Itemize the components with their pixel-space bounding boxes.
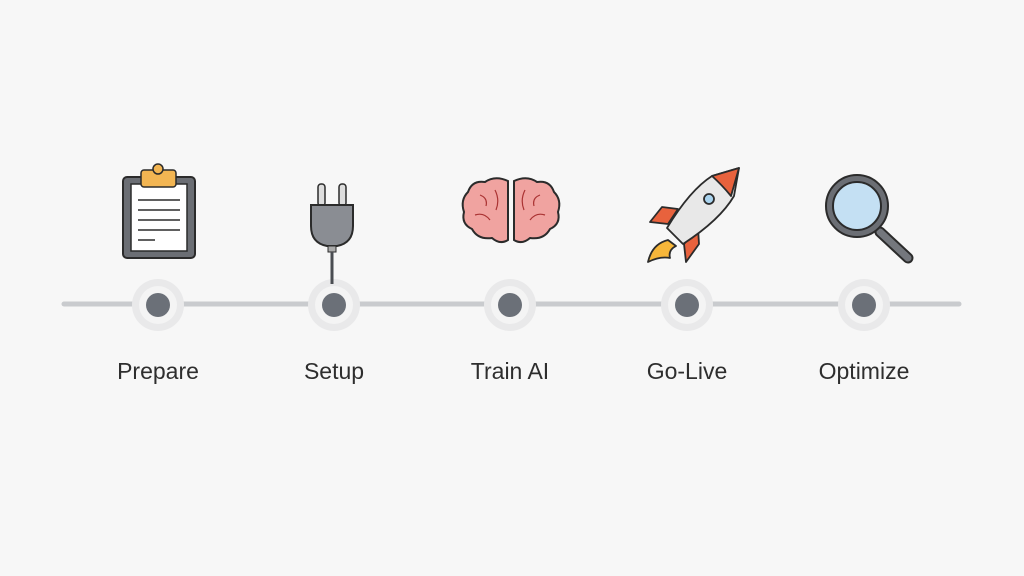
node: Train AI: [484, 279, 536, 331]
icon: plug: [311, 184, 353, 284]
node: Prepare: [132, 279, 184, 331]
label: Go-Live: Go-Live: [647, 358, 727, 384]
icon: rocket: [648, 168, 739, 262]
node: Setup: [308, 279, 360, 331]
label: Prepare: Prepare: [117, 358, 199, 384]
label: Optimize: Optimize: [819, 358, 909, 384]
node: Go-Live: [661, 279, 713, 331]
icon: brain: [463, 178, 559, 242]
label: Setup: Setup: [304, 358, 364, 384]
node: Optimize: [838, 279, 890, 331]
label: Train AI: Train AI: [471, 358, 549, 384]
icon: clipboard: [123, 164, 195, 258]
icon: magnifier: [826, 175, 908, 258]
timeline line: [64, 302, 959, 306]
